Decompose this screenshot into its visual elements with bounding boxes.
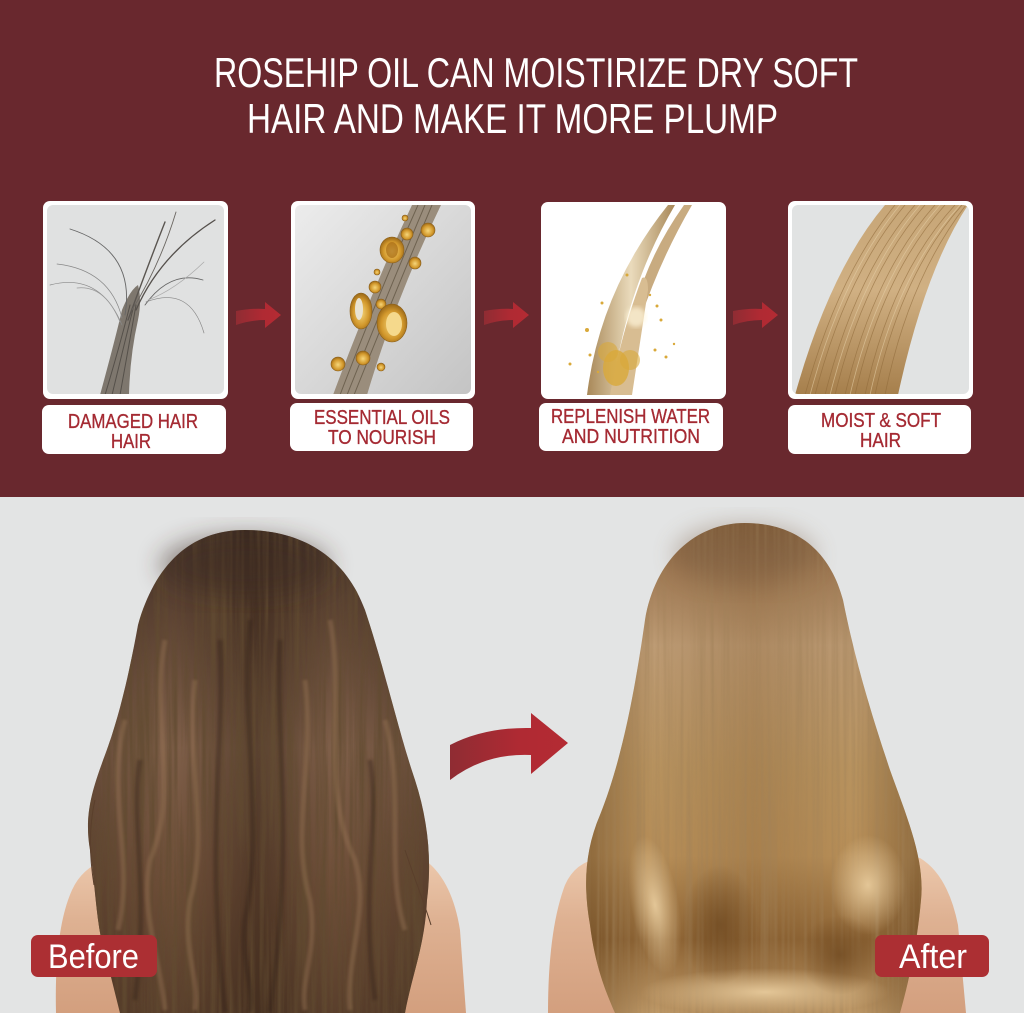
panel: essential oils image (291, 201, 475, 399)
badge: after: After (899, 938, 967, 976)
after: shoulders (548, 858, 966, 1013)
arrow 3 (733, 302, 778, 328)
label: damaged hair: DAMAGED HAIR (68, 411, 198, 433)
arrow: before to after (450, 713, 568, 780)
arrow 2 (484, 302, 529, 328)
label: moist soft hair (788, 405, 971, 454)
title: HAIR AND MAKE IT MORE PLUMP (247, 95, 778, 142)
badge: before: Before (48, 938, 139, 976)
title (214, 49, 858, 142)
arrow 1 (236, 302, 281, 328)
panel: replenish image (541, 202, 726, 399)
label: damaged hair (42, 405, 226, 454)
label: essential oils (290, 403, 473, 451)
label: moist soft hair: MOIST & SOFT (821, 410, 941, 432)
after: sleek blonde hair (586, 523, 922, 1016)
label: essential oils: ESSENTIAL OILS (314, 407, 450, 429)
label: replenish water: REPLENISH WATER (551, 406, 710, 428)
label: damaged hair: HAIR (111, 431, 151, 453)
label: moist soft hair: HAIR (860, 430, 901, 452)
label: replenish water (539, 403, 723, 451)
before: wavy brown hair (88, 530, 431, 1013)
badge: after (875, 935, 989, 977)
before: shoulders (56, 860, 466, 1013)
panel: maroon header (0, 0, 1024, 497)
label: replenish water: AND NUTRITION (562, 426, 700, 448)
label: essential oils: TO NOURISH (328, 427, 436, 449)
panel: moist soft hair image (788, 201, 973, 399)
panel: damaged hair image (43, 201, 228, 399)
panel: before and after photo (0, 497, 1024, 1016)
